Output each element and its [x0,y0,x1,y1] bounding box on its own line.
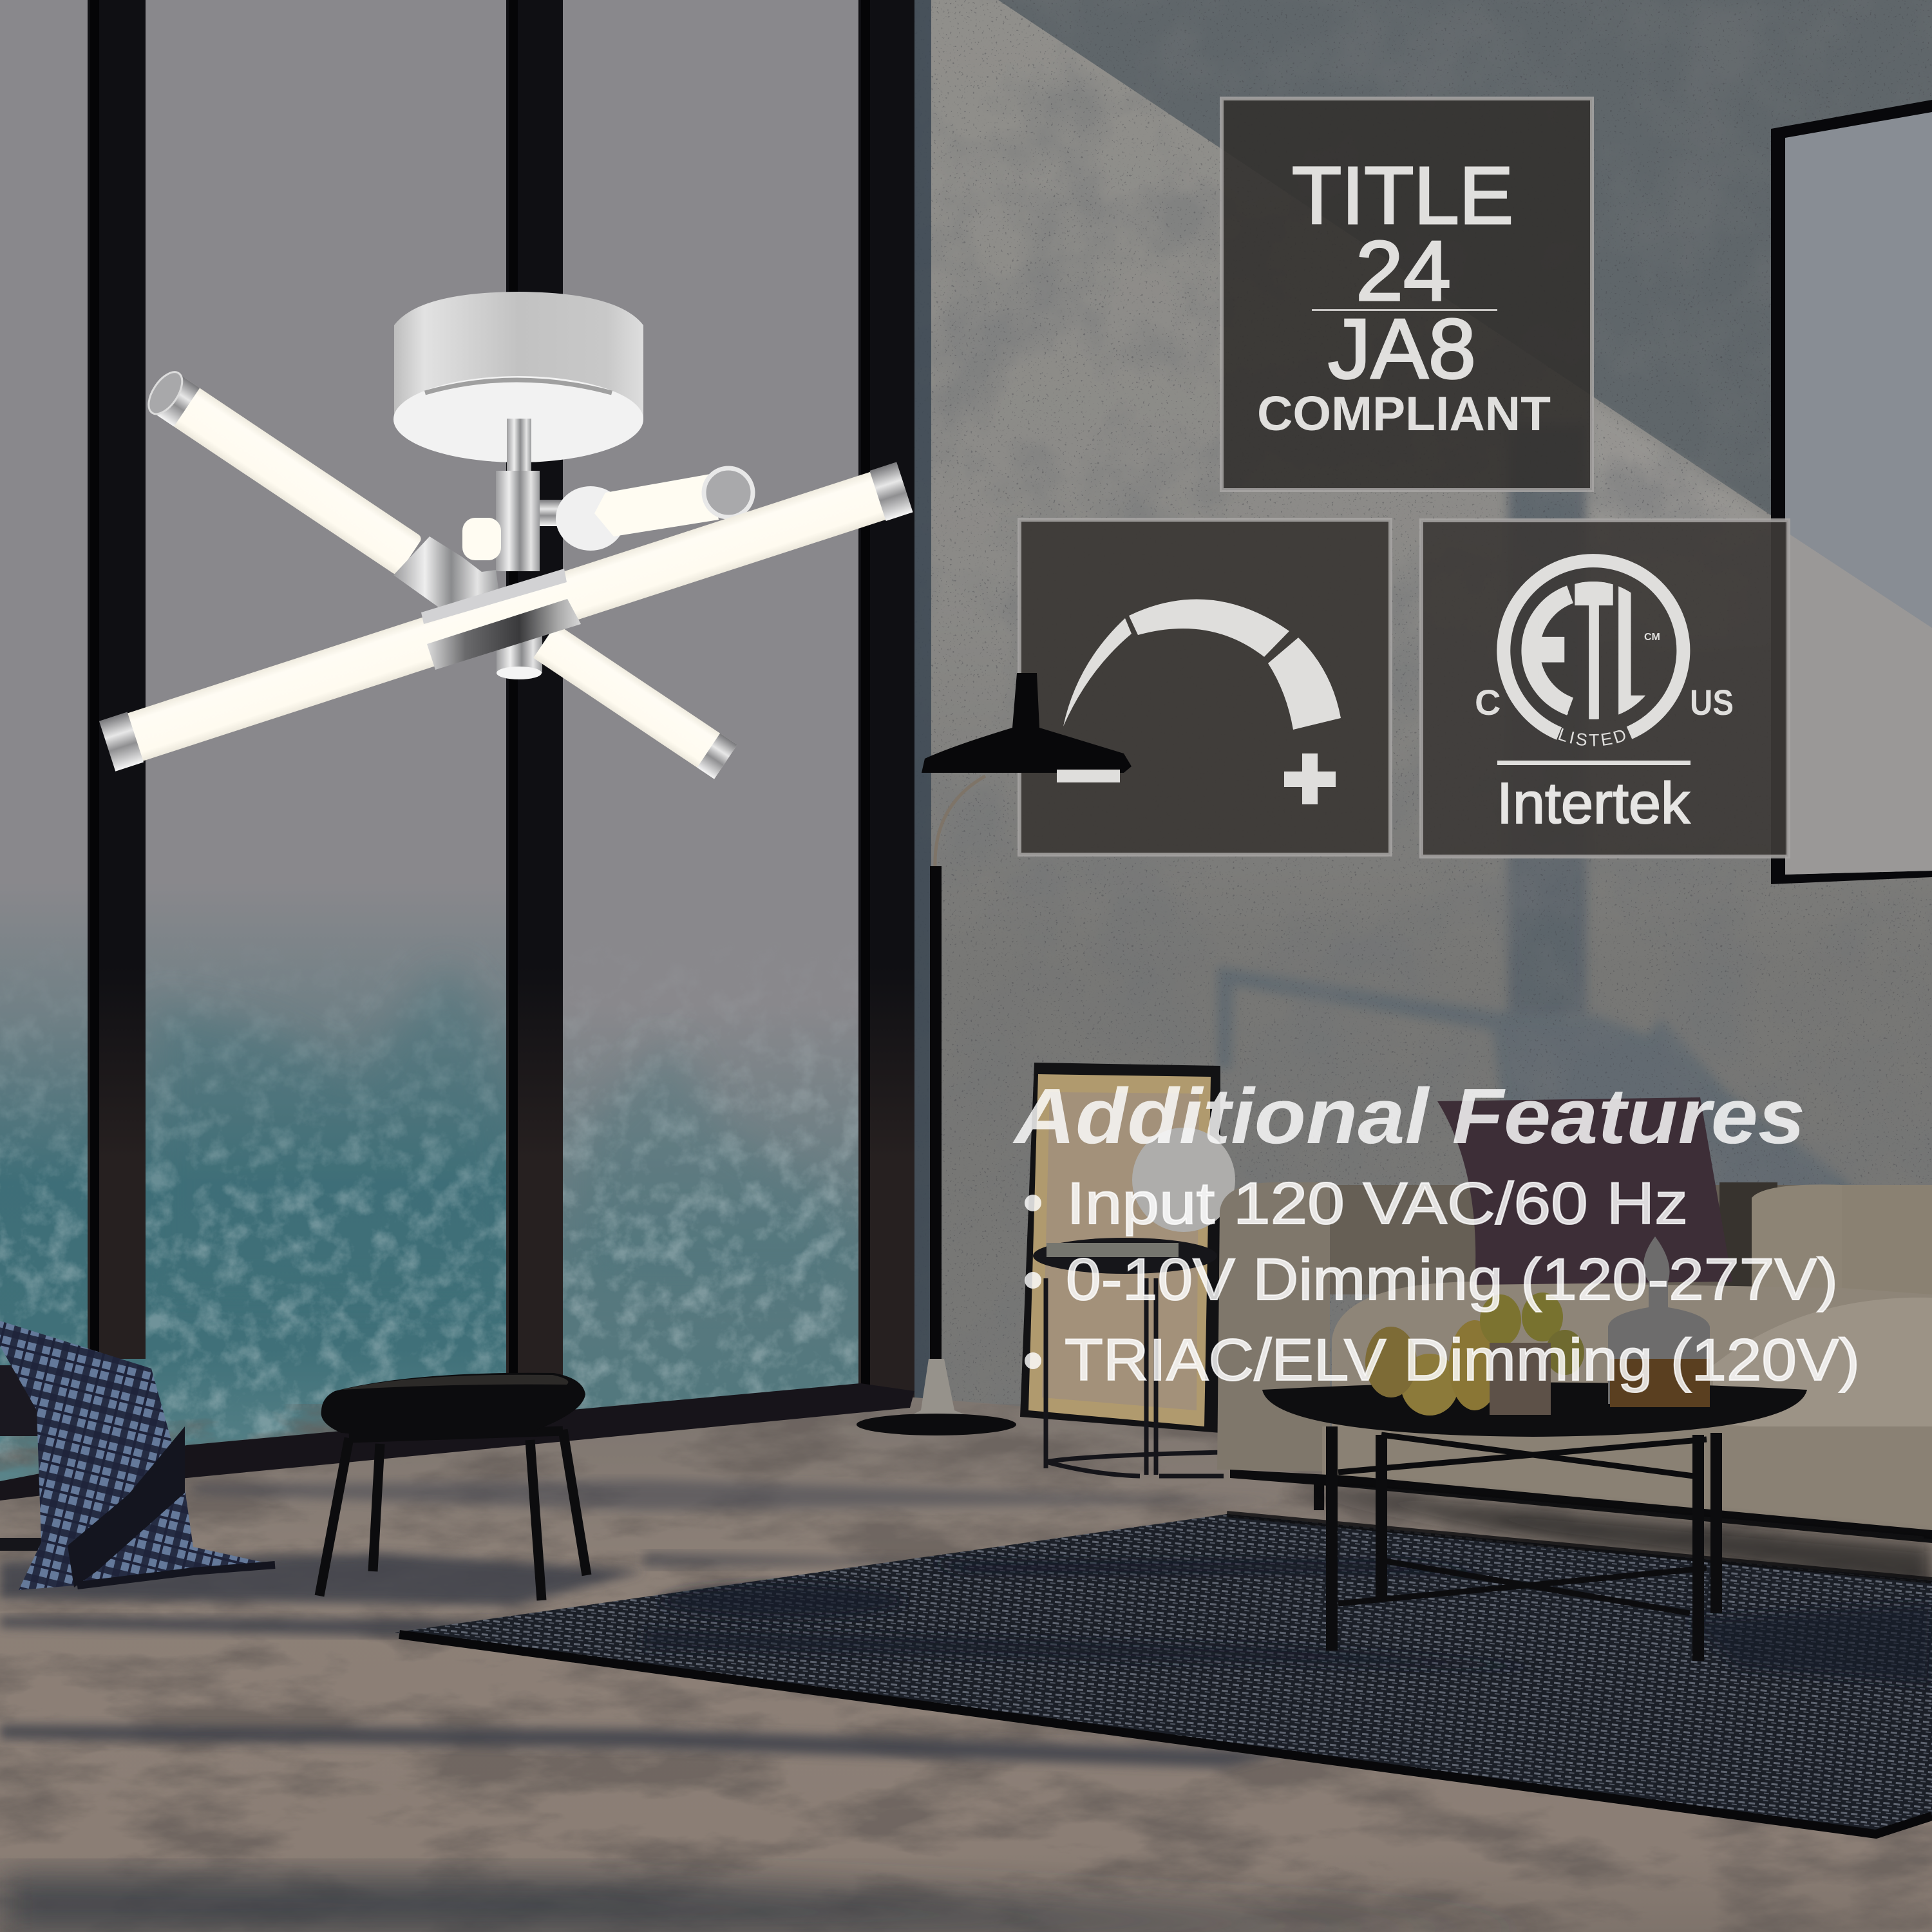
heading: 24: 24 [1356,223,1451,318]
text block: additional features [1012,1072,1860,1393]
long tube [99,462,913,772]
label: C: C [1475,682,1501,723]
chandelier fixture [99,292,913,779]
floor [0,1397,1932,1932]
stool [319,1373,587,1600]
short left stub [462,518,501,560]
logo letters: ETL [1540,582,1646,719]
window glass with misty forest [0,0,914,1507]
concrete wall [908,0,1932,1481]
bullet: TRIAC dimming: TRIAC/ELV Dimming (120V) [1065,1327,1860,1393]
heading: JA8: JA8 [1328,301,1476,396]
sofa [1217,1182,1932,1591]
panel: ETL listed [1419,518,1790,858]
leaning canvas [1020,1063,1220,1433]
label: US: US [1690,682,1734,723]
heading: TITLE: TITLE [1292,150,1513,241]
diagonal tube lower [533,623,737,779]
upper clamp [421,569,567,624]
icon: ETL ring [1504,561,1683,734]
heading: Additional Features: Additional Features [1012,1072,1805,1160]
purple pillow [1437,1097,1732,1285]
bullet: input voltage: Input 120 VAC/60 Hz [1066,1171,1688,1236]
arm bracket [393,536,498,609]
side table with globe lamp [1033,1128,1235,1476]
floor lamp pole and base [857,776,1016,1435]
diagonal tube upper [142,366,423,576]
framed picture [1771,100,1932,884]
coffee table with fruit and decanter [1262,1236,1807,1661]
panel: dimming [1019,520,1390,855]
panel: ETL listed: L [1614,538,1662,762]
canopy [393,292,643,462]
icon: dimming gauge [1057,600,1341,804]
logo letters: ETL: T [1575,538,1613,762]
floor lamp shade [922,673,1132,773]
stem [496,419,542,679]
label: LISTED: LISTED [1558,728,1625,746]
window frame: mullions and sill [0,0,914,1501]
bullet: 0-10V dimming: 0-10V Dimming (120-277V) [1066,1247,1838,1312]
logo letters: ETL: E [1524,538,1570,762]
rug [394,1514,1932,1836]
panel: title 24 [1222,99,1592,490]
chrome centre sleeve [427,599,581,670]
label: COMPLIANT: COMPLIANT [1257,386,1551,440]
short right arm [540,468,753,551]
label: Intertek: Intertek [1497,772,1690,836]
label: CM mark: CM [1644,632,1660,643]
plaid blanket and bench [0,1321,275,1590]
icon: inner crescent of logo [1531,594,1570,706]
